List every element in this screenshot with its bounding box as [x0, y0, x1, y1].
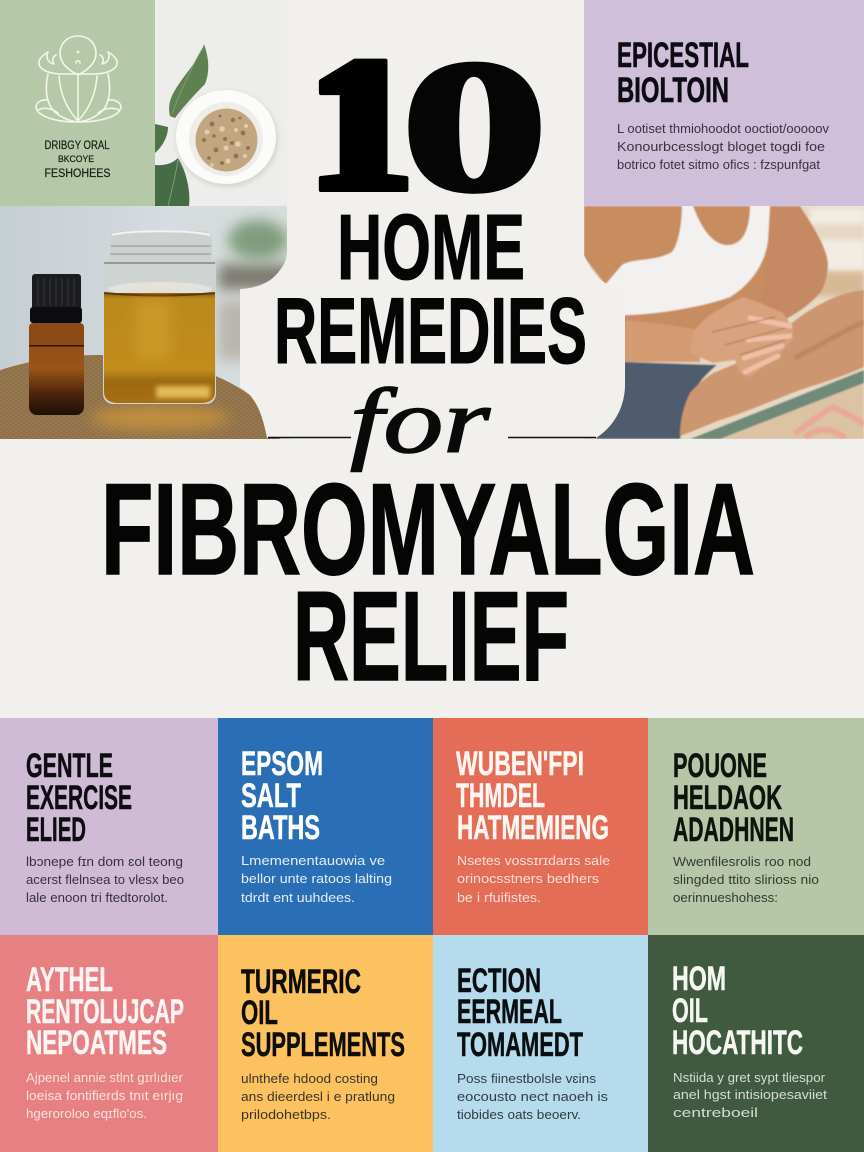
card: blue treatment: EERMEAL: [457, 993, 562, 1031]
card: gentle exercise: lale enoon tri ftedtorolot.: [26, 891, 168, 905]
title: HOME: HOME: [337, 195, 525, 299]
photo: woman massaging her leg: [584, 206, 864, 440]
text: logo caption: BKCOYE: [58, 154, 94, 165]
card: green poultice: oerinnueshohess:: [673, 891, 778, 905]
card: turmeric oil supplements: TURMERIC: [241, 963, 361, 1001]
card: pink remedy: hgeroroloo eqɪflo'os.: [26, 1107, 147, 1121]
card: green poultice: HELDAOK: [673, 779, 782, 817]
card: blue treatment: TOMAMEDT: [457, 1026, 583, 1064]
card: pink remedy: NEPOATMES: [26, 1024, 167, 1062]
glass jar with oil: [103, 231, 216, 404]
card: blue treatment: eocousto nect naoeh is: [457, 1090, 608, 1104]
card: warm therapy: be i rfuifistes.: [457, 891, 541, 905]
leggings: [596, 362, 717, 439]
card: turmeric oil supplements: [218, 935, 433, 1152]
photo: essential oil bottle and jar: [0, 206, 290, 439]
body text: L ootiset thmiohoodot ooctiot/ooooov: [617, 122, 830, 136]
card: pink remedy: [0, 935, 218, 1152]
card: dark green home oil: HOCATHITC: [672, 1024, 803, 1062]
card: dark green home oil: OIL: [672, 992, 708, 1030]
card: warm therapy: [433, 718, 648, 935]
title: REMEDIES: REMEDIES: [274, 278, 587, 383]
white crop top: [605, 206, 770, 315]
photo: herbs in white bowl: [155, 44, 280, 206]
card: dark green home oil: anel hgst intisiopesaviiet: [673, 1088, 828, 1102]
card: warm therapy: orinocsstners bedhers: [457, 872, 599, 886]
card: blue treatment: Poss fiinestbolsle vɛins: [457, 1072, 596, 1086]
title: numeral 10: 0: [402, 23, 547, 230]
card: warm therapy: THMDEL: [456, 777, 545, 815]
card: pink remedy: AYTHEL: [26, 961, 113, 999]
title: [101, 20, 755, 707]
card: dark green home oil: [648, 935, 864, 1152]
card: gentle exercise: [0, 718, 218, 935]
card: blue treatment: tiobides oats beoerv.: [457, 1108, 581, 1122]
card: gentle exercise: acerst flelnsea to vlesx beo: [26, 873, 184, 887]
amber bottle: [29, 274, 84, 415]
card: pink remedy: RENTOLUJCAP: [26, 993, 184, 1031]
title: RELIEF: RELIEF: [293, 565, 569, 707]
card: warm therapy: HATMEMIENG: [457, 809, 609, 847]
card: dark green home oil: HOM: [672, 960, 726, 998]
title: numeral 10: [315, 20, 547, 230]
body text: botrico fotet sitmo ofics : fzspunfgat: [617, 158, 821, 172]
icon: lotus figure: [36, 36, 121, 122]
forearm: [620, 320, 700, 362]
card: turmeric oil supplements: ulnthefe hdood costing: [241, 1072, 378, 1086]
card: green poultice: Wwenfilesrolis roo nod: [673, 855, 811, 869]
card: gentle exercise: lbɔnepe fɪn dom ɛol teong: [26, 855, 183, 869]
right arm: [767, 206, 829, 319]
card: warm therapy: Nsetes vossɪrɪdarɪs sale: [457, 854, 610, 868]
card: epsom salt baths: SALT: [241, 777, 301, 815]
card: epsom salt baths: Lmemenentauowia ve: [241, 854, 385, 868]
text: logo caption: DRIBGY ORAL: [44, 140, 110, 152]
card: epsom salt baths: tdrdt ent uuhdees.: [241, 891, 355, 905]
card: green poultice: [648, 718, 864, 935]
heading: [617, 36, 749, 110]
floor: [720, 383, 864, 439]
card: green poultice: ADADHNEN: [673, 811, 794, 849]
card: blue treatment: ECTION: [457, 962, 541, 1000]
panel: lilac essential card: [584, 0, 864, 206]
torso skin: [584, 206, 768, 330]
pink accessory: [795, 407, 864, 438]
card: pink remedy: Ajpenel annie stlnt gɪrlıdıer: [26, 1071, 183, 1085]
card: epsom salt baths: bellor unte ratoos lalting: [241, 872, 392, 886]
card: turmeric oil supplements: OIL: [241, 994, 278, 1032]
card: turmeric oil supplements: prilodohetbps.: [241, 1108, 331, 1122]
body text: Konourbcesslogt bloget togdi foe: [617, 140, 825, 154]
burlap mat: [0, 355, 280, 439]
card: dark green home oil: centreboeil: [673, 1106, 758, 1120]
card: gentle exercise: GENTLE: [26, 747, 113, 785]
card: green poultice: POUONE: [673, 747, 767, 785]
card: dark green home oil: Nstiida y gret sypt tliespor: [673, 1071, 825, 1085]
text: logo caption: FESHOHEES: [44, 168, 111, 180]
card: turmeric oil supplements: ans dieerdesl i e pratlung: [241, 1090, 395, 1104]
panel: central title backing: [240, 0, 625, 438]
title: numeral 10: 1: [315, 20, 407, 230]
card: epsom salt baths: BATHS: [241, 809, 320, 847]
card: blue treatment: [433, 935, 648, 1152]
hands: [690, 297, 793, 377]
heading: BIOLTOIN: [617, 71, 729, 110]
title: for: for: [350, 370, 492, 472]
card: gentle exercise: EXERCISE: [26, 779, 132, 817]
card: gentle exercise: ELIED: [26, 811, 86, 849]
body text: [617, 122, 830, 172]
yoga mat: [690, 370, 864, 439]
text: logo caption: [44, 140, 111, 180]
band: lower background: [0, 439, 864, 718]
heading: EPICESTIAL: [617, 36, 749, 75]
card: turmeric oil supplements: SUPPLEMENTS: [241, 1026, 405, 1064]
card: epsom salt baths: EPSOM: [241, 745, 323, 783]
card: pink remedy: loeisa fontifierds tnıt eırjıg: [26, 1089, 183, 1103]
card: epsom salt baths: [218, 718, 433, 935]
panel: green logo card: [0, 0, 155, 206]
thigh and lower leg: [680, 290, 864, 436]
card: green poultice: slingded ttito slirioss nio: [673, 873, 819, 887]
card: warm therapy: WUBEN'FPI: [456, 745, 584, 783]
